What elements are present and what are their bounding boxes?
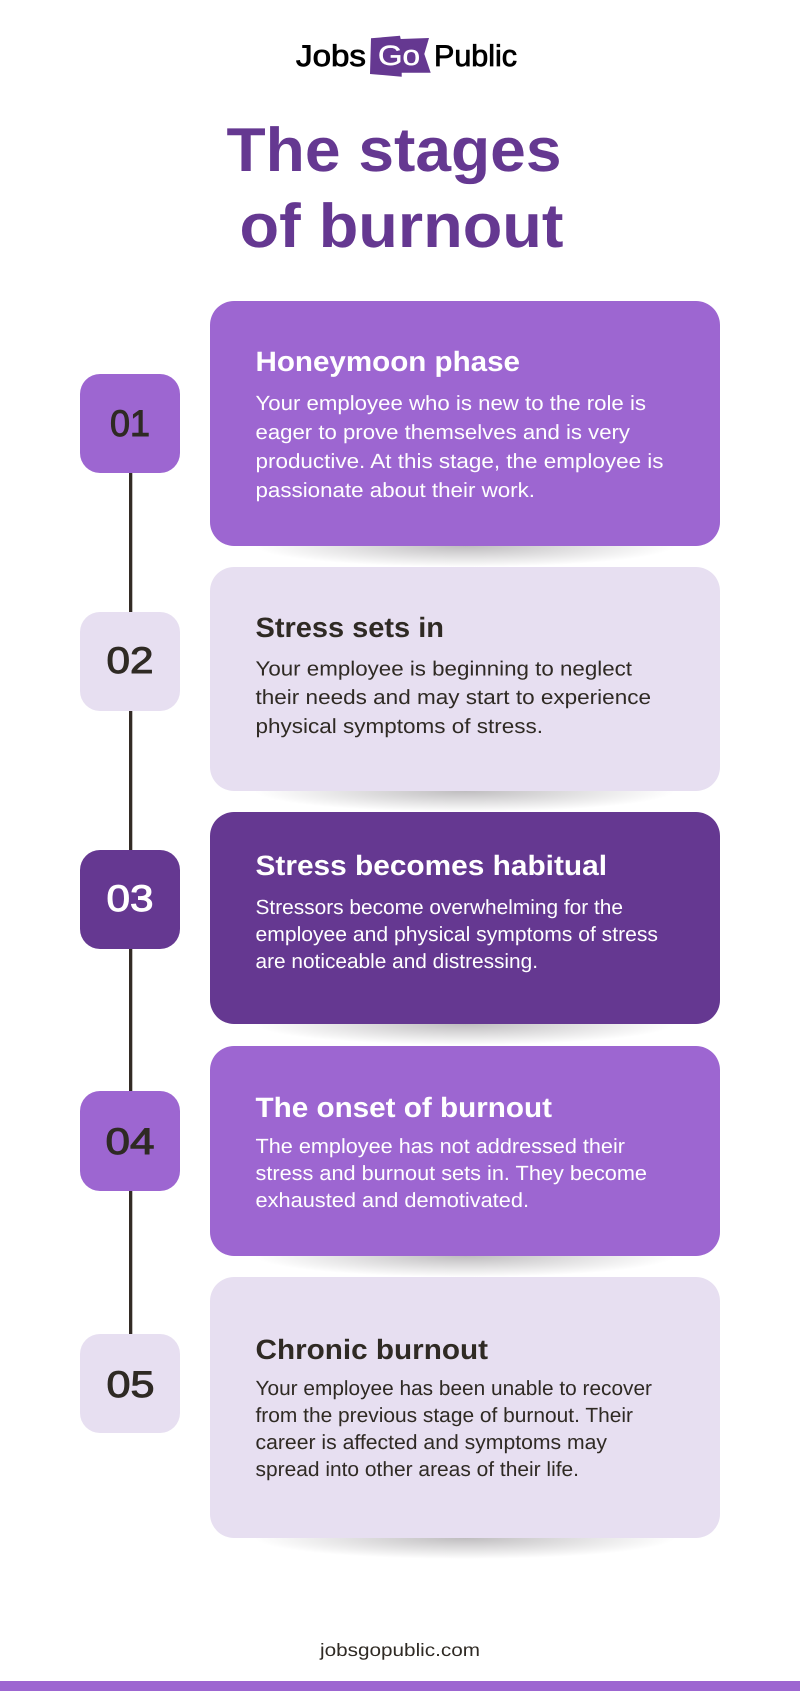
badge 01 [80,374,180,473]
heading: Stress becomes habitual: Stress becomes habitual [256,850,607,881]
text block: Chronic burnout: career is affected and symptoms may [256,1431,608,1454]
logo flag [370,36,431,77]
badge 05 [80,1334,180,1433]
text block: The onset of burnout: The employee has not addressed their [256,1135,625,1158]
text block: Honeymoon phase: passionate about their work. [256,479,535,502]
footer website: jobsgopublic.com [319,1640,480,1660]
text block: Stress becomes habitual: Stressors become overwhelming for the [256,896,623,919]
badge 05: 05 [106,1364,154,1405]
panel: The onset of burnout [210,1046,720,1277]
panel: Honeymoon phase [210,301,720,567]
heading: Chronic burnout: Chronic burnout [256,1334,488,1365]
title: of burnout [240,192,564,261]
badge 03: 03 [106,878,154,919]
text block: The onset of burnout: stress and burnout sets in. They become [256,1162,647,1185]
panel: Chronic burnout [210,1277,720,1559]
title: The stages [226,116,562,185]
logo text: Jobs: Jobs [296,40,366,73]
heading: Stress sets in: Stress sets in [256,612,444,643]
text block: Honeymoon phase: productive. At this stage, the employee is [256,450,664,473]
title [226,116,564,261]
badge 02 [80,612,180,711]
timeline connector [129,473,132,1334]
badge 03 [80,850,180,949]
text block: Honeymoon phase: eager to prove themselves and is very [256,421,631,444]
text block: Stress sets in: Your employee is beginning to neglect [256,658,632,680]
heading: Honeymoon phase: Honeymoon phase [256,346,520,377]
text block: Chronic burnout [256,1377,652,1481]
badge 01: 01 [110,403,150,444]
logo text: Go: Go [378,40,420,71]
heading: The onset of burnout: The onset of burnout [256,1092,552,1123]
text block: Stress becomes habitual: employee and physical symptoms of stress [256,923,658,946]
panel: Stress sets in [210,567,720,812]
text block: Honeymoon phase: Your employee who is new to the role is [256,392,646,415]
text block: Stress sets in: their needs and may start to experience [256,686,651,709]
logo text: Public: Public [434,40,517,73]
text block: Chronic burnout: spread into other areas of their life. [256,1458,579,1481]
badge 02: 02 [106,640,154,681]
footer bar [0,1681,800,1691]
text block: Honeymoon phase [256,392,664,502]
text block: The onset of burnout [256,1135,647,1212]
text block: Stress sets in [256,658,651,738]
text block: Stress becomes habitual [256,896,658,973]
text block: Stress becomes habitual: are noticeable and distressing. [256,950,538,973]
badge 04: 04 [106,1121,154,1162]
badge 04 [80,1091,180,1191]
text block: Stress sets in: physical symptoms of stress. [256,715,543,738]
text block: Chronic burnout: from the previous stage of burnout. Their [256,1404,633,1427]
panel: Stress becomes habitual [210,812,720,1045]
text block: Chronic burnout: Your employee has been unable to recover [256,1377,652,1400]
text block: The onset of burnout: exhausted and demotivated. [256,1189,529,1212]
logo [296,36,517,77]
